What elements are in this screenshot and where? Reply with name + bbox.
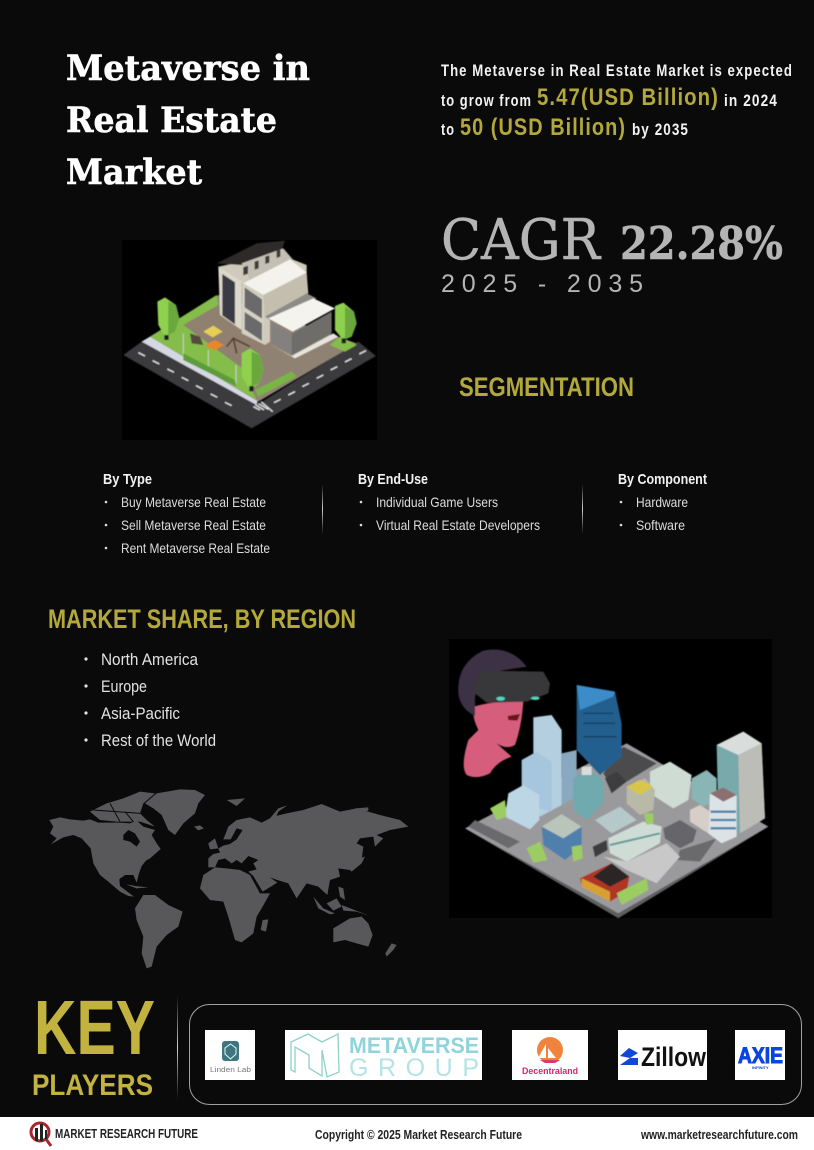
- key players panel: [190, 1004, 802, 1104]
- logo: Metaverse Group: [285, 1030, 482, 1082]
- logo: Zillow: [618, 1030, 707, 1080]
- segment column: by component: By Component: [618, 471, 707, 488]
- logo: Metaverse Group: GROUP: [349, 1054, 479, 1082]
- segment column: by type: Buy Metaverse Real Estate: [121, 494, 266, 510]
- logo: Market Research Future: MARKET RESEARCH FUTURE: [55, 1127, 198, 1141]
- segment column: by end-use: Individual Game Users: [376, 494, 498, 510]
- CAGR figure: 2025 - 2035: [441, 270, 643, 298]
- heading: key players: PLAYERS: [32, 1069, 153, 1102]
- market forecast text: [441, 62, 793, 141]
- segment column: by component: Software: [636, 517, 685, 533]
- copyright: Copyright © 2025 Market Research Future: [315, 1128, 522, 1142]
- segment column: by end-use: By End-Use: [358, 471, 428, 488]
- market forecast text: to grow from: [441, 92, 532, 110]
- logo: Axie Infinity: INFINITY: [752, 1065, 769, 1070]
- region list: [84, 650, 216, 750]
- market forecast text: by 2035: [632, 121, 689, 139]
- logo: Linden Lab: Linden Lab: [210, 1067, 251, 1074]
- logo: Decentraland: Decentraland: [522, 1066, 578, 1077]
- region list: Europe: [101, 677, 147, 696]
- logo: Decentraland: [512, 1030, 588, 1080]
- illustration: isometric house: [122, 240, 377, 440]
- segment column: by type: By Type: [103, 471, 152, 488]
- heading: segmentation: SEGMENTATION: [459, 372, 634, 402]
- segment column: by component: Hardware: [636, 494, 688, 510]
- segment column: by type: Sell Metaverse Real Estate: [121, 517, 266, 533]
- logo: Zillow: Zillow: [641, 1042, 707, 1072]
- heading: market share by region: MARKET SHARE, BY REGION: [48, 604, 356, 634]
- market forecast text: 5.47(USD Billion): [537, 84, 719, 111]
- logo: Market Research Future: [31, 1123, 198, 1146]
- logo: Metaverse Group: METAVERSE: [349, 1033, 479, 1058]
- market forecast text: in 2024: [724, 92, 778, 110]
- segment column: by end-use: [358, 471, 540, 533]
- logo: Axie Infinity: [735, 1030, 785, 1080]
- region list: Rest of the World: [101, 731, 216, 750]
- segment column: by end-use: Virtual Real Estate Developers: [376, 517, 540, 533]
- segment column: by type: [103, 471, 270, 556]
- logo: Axie Infinity: AXIE: [738, 1043, 783, 1068]
- footer: [0, 1117, 814, 1150]
- logo: Linden Lab: [205, 1030, 255, 1080]
- heading: key players: KEY: [34, 985, 155, 1071]
- market forecast text: to: [441, 121, 455, 139]
- CAGR figure: 22.28%: [620, 217, 783, 270]
- title: Real Estate: [66, 100, 277, 141]
- CAGR figure: CAGR: [441, 208, 602, 273]
- heading: key players: [32, 985, 155, 1102]
- title: Market: [66, 152, 202, 193]
- segment column: by component: [618, 471, 707, 533]
- illustration: VR user and city: [449, 639, 772, 918]
- segment column: by type: Rent Metaverse Real Estate: [121, 540, 270, 556]
- CAGR figure: [441, 208, 783, 298]
- title: Metaverse in: [66, 48, 310, 89]
- world map: [49, 789, 408, 968]
- region list: North America: [101, 650, 198, 669]
- region list: Asia-Pacific: [101, 704, 180, 723]
- title: [66, 48, 310, 193]
- market forecast text: 50 (USD Billion): [460, 114, 626, 141]
